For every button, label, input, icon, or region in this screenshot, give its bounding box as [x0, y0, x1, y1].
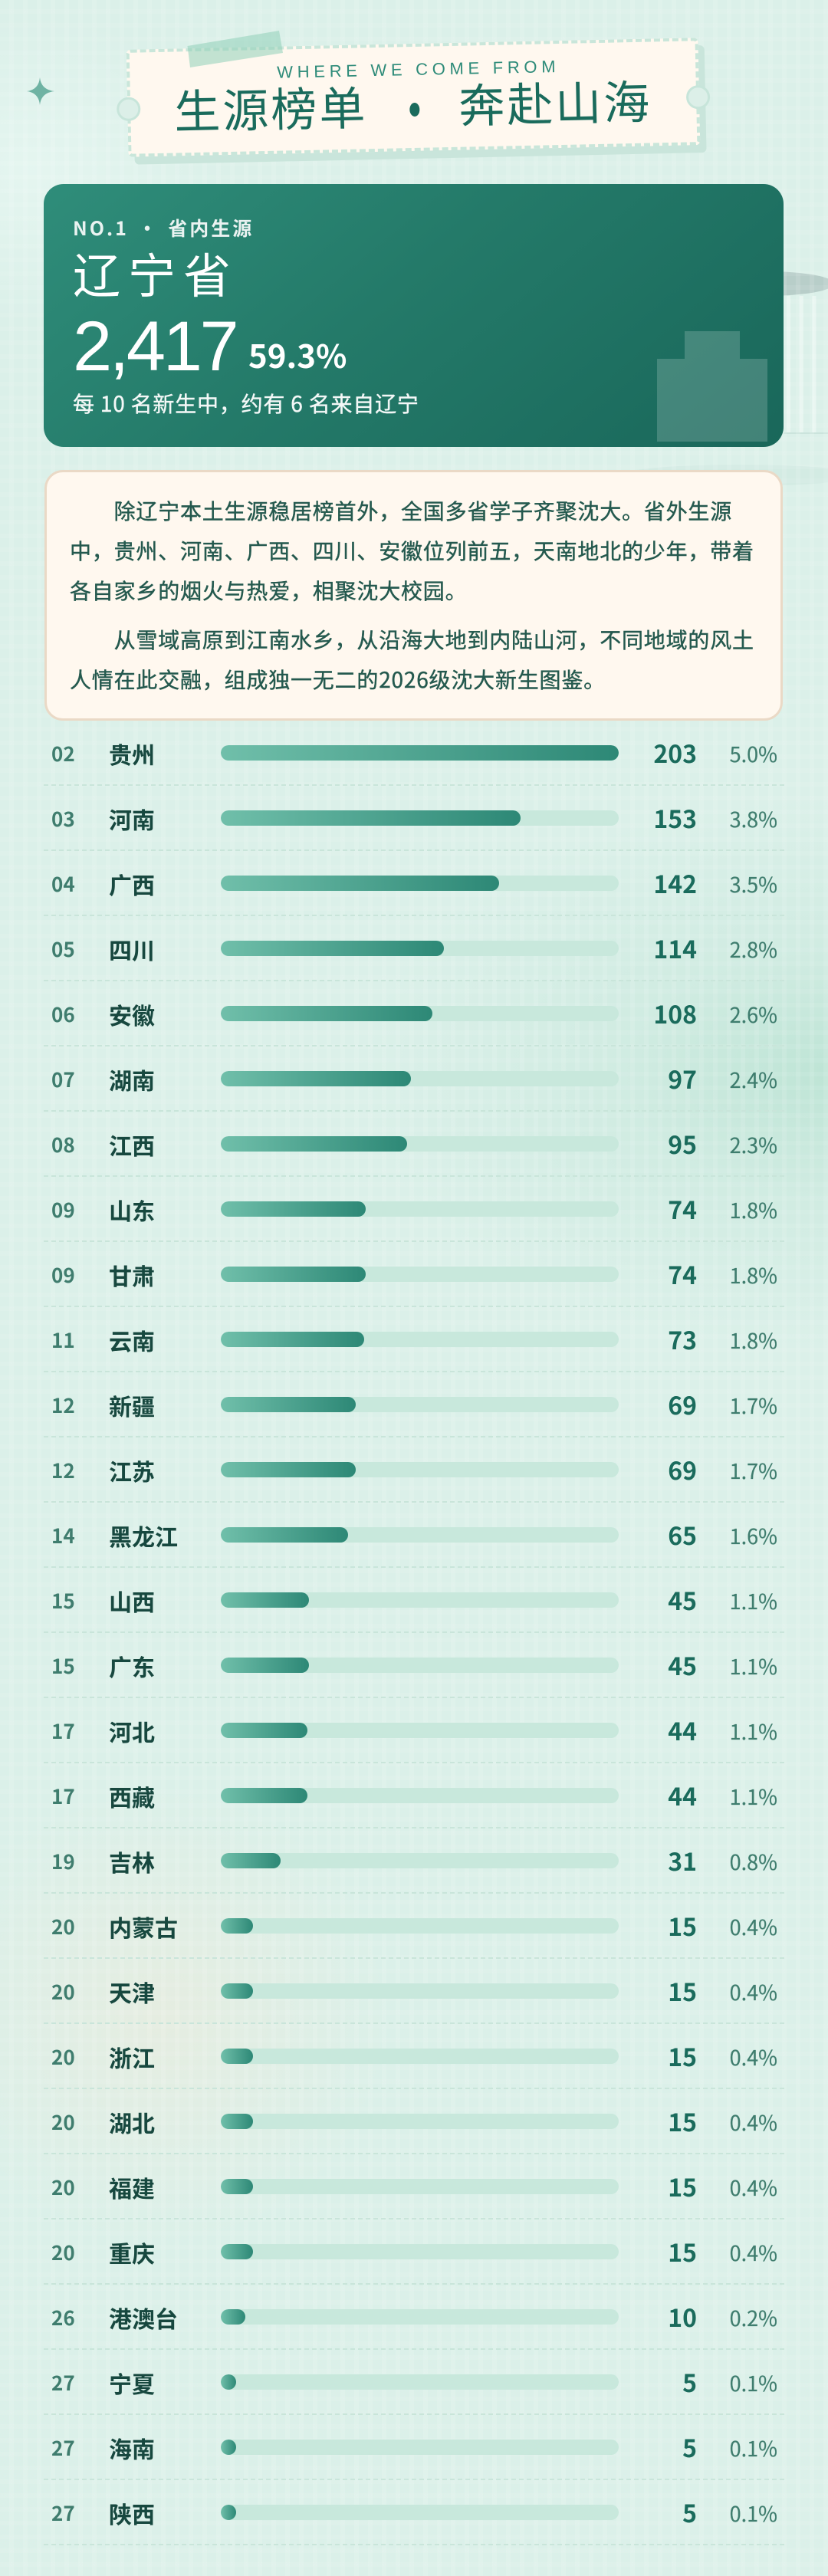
row: 四川: 2.8%	[730, 934, 777, 964]
row: 海南: 5	[682, 2430, 697, 2465]
row: 河南: 3.8%	[730, 803, 777, 833]
bar: 宁夏	[221, 2374, 619, 2390]
bar: 湖北	[221, 2114, 619, 2129]
bar: 河北	[221, 1723, 619, 1738]
row: 江苏	[44, 1438, 784, 1503]
bar: 河南	[221, 810, 619, 826]
row: 天津: 20	[51, 1977, 75, 2006]
row: 河南: 03	[51, 804, 75, 833]
title left part: 生源榜单	[174, 83, 368, 139]
row: 广东	[44, 1633, 784, 1698]
row: 重庆: 15	[668, 2234, 697, 2269]
row: 甘肃	[44, 1242, 784, 1307]
row: 浙江: 0.4%	[730, 2042, 777, 2072]
title dot	[409, 103, 420, 117]
row: 江西: 95	[668, 1126, 697, 1162]
row: 安徽: 06	[51, 1000, 75, 1028]
bar: 广东	[221, 1658, 619, 1673]
bar: 江苏	[221, 1462, 619, 1477]
hero share: 59.3%	[248, 331, 347, 378]
row: 江苏: 1.7%	[730, 1455, 777, 1485]
row: 山东: 山东	[109, 1193, 155, 1227]
row: 福建: 20	[51, 2173, 75, 2201]
row: 山西: 45	[668, 1582, 697, 1618]
row: 河北: 1.1%	[730, 1716, 777, 1746]
row: 河南: 河南	[109, 802, 155, 836]
bar: 重庆	[221, 2244, 619, 2259]
washi tape	[187, 31, 283, 67]
row: 吉林: 19	[51, 1847, 75, 1875]
bar: 吉林	[221, 1853, 619, 1868]
row: 内蒙古: 0.4%	[730, 1911, 777, 1941]
bar: 天津	[221, 1983, 619, 1999]
row: 港澳台	[44, 2285, 784, 2350]
row: 广西: 142	[653, 866, 697, 901]
row: 天津	[44, 1959, 784, 2024]
panel: intro text	[44, 470, 783, 721]
row: 湖北: 20	[51, 2108, 75, 2136]
row: 浙江	[44, 2024, 784, 2089]
bar: 浙江	[221, 2049, 619, 2064]
row: 江西: 江西	[109, 1128, 155, 1162]
bar: 新疆	[221, 1397, 619, 1412]
row: 河北: 河北	[109, 1714, 155, 1748]
row: 新疆	[44, 1372, 784, 1438]
row: 港澳台: 0.2%	[730, 2302, 777, 2332]
row: 湖南: 07	[51, 1065, 75, 1093]
bar: 山东	[221, 1201, 619, 1217]
ticket notch right	[686, 85, 710, 110]
row: 天津: 天津	[109, 1975, 155, 2009]
row: 山东	[44, 1177, 784, 1242]
row: 云南: 73	[668, 1322, 697, 1357]
row: 湖北: 15	[668, 2104, 697, 2139]
bar: 湖南	[221, 1071, 619, 1086]
hero count: 2,417	[73, 307, 236, 386]
row: 四川: 05	[51, 935, 75, 963]
row: 重庆: 0.4%	[730, 2237, 777, 2267]
row: 陕西	[44, 2480, 784, 2545]
background building silhouette	[784, 271, 828, 434]
row: 新疆: 新疆	[109, 1388, 155, 1422]
row: 宁夏	[44, 2350, 784, 2415]
ticket notch left	[117, 97, 141, 121]
row: 山西: 15	[51, 1586, 75, 1615]
bar: 山西	[221, 1592, 619, 1608]
English kicker: WHERE WE COME FROM	[277, 57, 560, 82]
bar: 海南	[221, 2440, 619, 2455]
paragraph two: 从雪域高原到江南水乡，从沿海大地到内陆山河，不同地域的风土人情在此交融，组成独一无二的2026级沈大新生图鉴。	[70, 624, 754, 695]
row: 西藏: 1.1%	[730, 1781, 777, 1811]
hero kicker: NO.1 · 省内生源	[73, 214, 254, 242]
row: 内蒙古: 内蒙古	[109, 1910, 178, 1944]
bar: 陕西	[221, 2505, 619, 2520]
row: 江西	[44, 1112, 784, 1177]
row: 河北: 44	[668, 1713, 697, 1748]
row: 宁夏: 0.1%	[730, 2367, 777, 2397]
row: 内蒙古: 20	[51, 1912, 75, 1940]
row: 港澳台: 港澳台	[109, 2301, 178, 2334]
title right part: 奔赴山海	[458, 77, 652, 133]
row: 甘肃: 1.8%	[730, 1260, 777, 1290]
row: 港澳台: 26	[51, 2303, 75, 2331]
row: 湖南: 2.4%	[730, 1064, 777, 1094]
row: 广西: 3.5%	[730, 869, 777, 899]
row: 云南: 1.8%	[730, 1325, 777, 1355]
row: 安徽: 安徽	[109, 997, 155, 1031]
row: 山东: 74	[668, 1191, 697, 1227]
bar: 甘肃	[221, 1267, 619, 1282]
icon: building	[657, 331, 767, 442]
row: 河南: 153	[653, 800, 697, 836]
row: 湖南	[44, 1046, 784, 1112]
ranking list	[44, 735, 784, 2545]
row: 重庆: 20	[51, 2238, 75, 2266]
row: 福建: 0.4%	[730, 2172, 777, 2202]
row: 宁夏: 27	[51, 2368, 75, 2397]
bar: 西藏	[221, 1788, 619, 1803]
row: 湖北: 湖北	[109, 2105, 155, 2139]
row: 云南: 11	[51, 1326, 75, 1354]
icon: sparkle star	[27, 77, 54, 105]
row: 江苏: 69	[668, 1452, 697, 1487]
row: 黑龙江: 14	[51, 1521, 75, 1549]
row: 内蒙古: 15	[668, 1908, 697, 1944]
row: 广东: 15	[51, 1651, 75, 1680]
row: 江苏: 江苏	[109, 1454, 155, 1487]
bar: 福建	[221, 2179, 619, 2194]
row: 安徽: 2.6%	[730, 999, 777, 1029]
row: 吉林: 吉林	[109, 1845, 155, 1878]
row: 云南: 云南	[109, 1323, 155, 1357]
row: 吉林	[44, 1829, 784, 1894]
row: 广东: 45	[668, 1648, 697, 1683]
row: 新疆: 69	[668, 1387, 697, 1422]
row: 陕西: 5	[682, 2495, 697, 2530]
row: 黑龙江	[44, 1503, 784, 1568]
row: 浙江: 20	[51, 2042, 75, 2071]
row: 西藏: 西藏	[109, 1779, 155, 1813]
row: 吉林: 0.8%	[730, 1846, 777, 1876]
row: 贵州: 5.0%	[730, 738, 777, 768]
row: 贵州: 02	[51, 739, 75, 767]
row: 吉林: 31	[668, 1843, 697, 1878]
row: 陕西: 0.1%	[730, 2498, 777, 2528]
row: 新疆: 1.7%	[730, 1390, 777, 1420]
bar: 黑龙江	[221, 1527, 619, 1543]
row: 港澳台: 10	[668, 2299, 697, 2334]
row: 天津: 15	[668, 1973, 697, 2009]
row: 陕西: 27	[51, 2499, 75, 2527]
row: 山西: 1.1%	[730, 1585, 777, 1615]
row: 贵州: 贵州	[109, 737, 155, 770]
row: 重庆: 重庆	[109, 2236, 155, 2269]
province name: 辽宁省	[73, 251, 238, 304]
row: 重庆	[44, 2220, 784, 2285]
row: 山东: 09	[51, 1195, 75, 1224]
row: 河北	[44, 1698, 784, 1763]
row: 云南	[44, 1307, 784, 1372]
row: 甘肃: 74	[668, 1257, 697, 1292]
bar: 内蒙古	[221, 1918, 619, 1934]
row: 福建	[44, 2154, 784, 2220]
row: 宁夏: 宁夏	[109, 2366, 155, 2400]
row: 湖南: 97	[668, 1061, 697, 1096]
row: 四川	[44, 916, 784, 981]
row: 黑龙江: 65	[668, 1517, 697, 1552]
row: 西藏: 44	[668, 1778, 697, 1813]
row: 江苏: 12	[51, 1456, 75, 1484]
row: 宁夏: 5	[682, 2364, 697, 2400]
row: 甘肃: 甘肃	[109, 1258, 155, 1292]
row: 广东: 广东	[109, 1649, 155, 1683]
bar: 安徽	[221, 1006, 619, 1021]
row: 海南: 0.1%	[730, 2433, 777, 2463]
row: 海南	[44, 2415, 784, 2480]
bar: 港澳台	[221, 2309, 619, 2325]
bar: 贵州	[221, 745, 619, 761]
row: 西藏: 17	[51, 1782, 75, 1810]
row: 浙江: 15	[668, 2039, 697, 2074]
row: 四川: 四川	[109, 932, 155, 966]
hero caption: 每 10 名新生中，约有 6 名来自辽宁	[73, 388, 419, 419]
row: 黑龙江: 1.6%	[730, 1520, 777, 1550]
title ticket	[127, 38, 700, 157]
row: 安徽	[44, 981, 784, 1046]
row: 湖北: 0.4%	[730, 2107, 777, 2137]
row: 黑龙江: 黑龙江	[109, 1519, 178, 1552]
row: 海南: 27	[51, 2433, 75, 2462]
row: 陕西: 陕西	[109, 2496, 155, 2530]
paragraph one: 除辽宁本土生源稳居榜首外，全国多省学子齐聚沈大。省外生源中，贵州、河南、广西、四川、安徽位列前五，天南地北的少年，带着各自家乡的烟火与热爱，相聚沈大校园。	[70, 495, 754, 606]
row: 四川: 114	[653, 931, 697, 966]
row: 河北: 17	[51, 1717, 75, 1745]
row: 新疆: 12	[51, 1391, 75, 1419]
row: 贵州: 203	[653, 735, 697, 770]
row: 福建: 15	[668, 2169, 697, 2204]
row: 内蒙古	[44, 1894, 784, 1959]
row: 山东: 1.8%	[730, 1194, 777, 1224]
bar: 广西	[221, 876, 619, 891]
row: 江西: 2.3%	[730, 1129, 777, 1159]
row: 山西	[44, 1568, 784, 1633]
row: 天津: 0.4%	[730, 1976, 777, 2006]
row: 广西: 04	[51, 869, 75, 898]
row: 江西: 08	[51, 1130, 75, 1158]
row: 贵州	[44, 721, 784, 786]
bar: 江西	[221, 1136, 619, 1152]
row: 西藏	[44, 1763, 784, 1829]
row: 广西	[44, 851, 784, 916]
row: 海南: 海南	[109, 2431, 155, 2465]
row: 安徽: 108	[653, 996, 697, 1031]
bar: 四川	[221, 941, 619, 956]
panel: top province hero	[44, 184, 784, 447]
bar: 云南	[221, 1332, 619, 1347]
row: 河南	[44, 786, 784, 851]
row: 甘肃: 09	[51, 1260, 75, 1289]
row: 山西: 山西	[109, 1584, 155, 1618]
row: 浙江: 浙江	[109, 2040, 155, 2074]
row: 湖南: 湖南	[109, 1063, 155, 1096]
row: 湖北	[44, 2089, 784, 2154]
row: 福建: 福建	[109, 2170, 155, 2204]
row: 广东: 1.1%	[730, 1651, 777, 1681]
row: 广西: 广西	[109, 867, 155, 901]
